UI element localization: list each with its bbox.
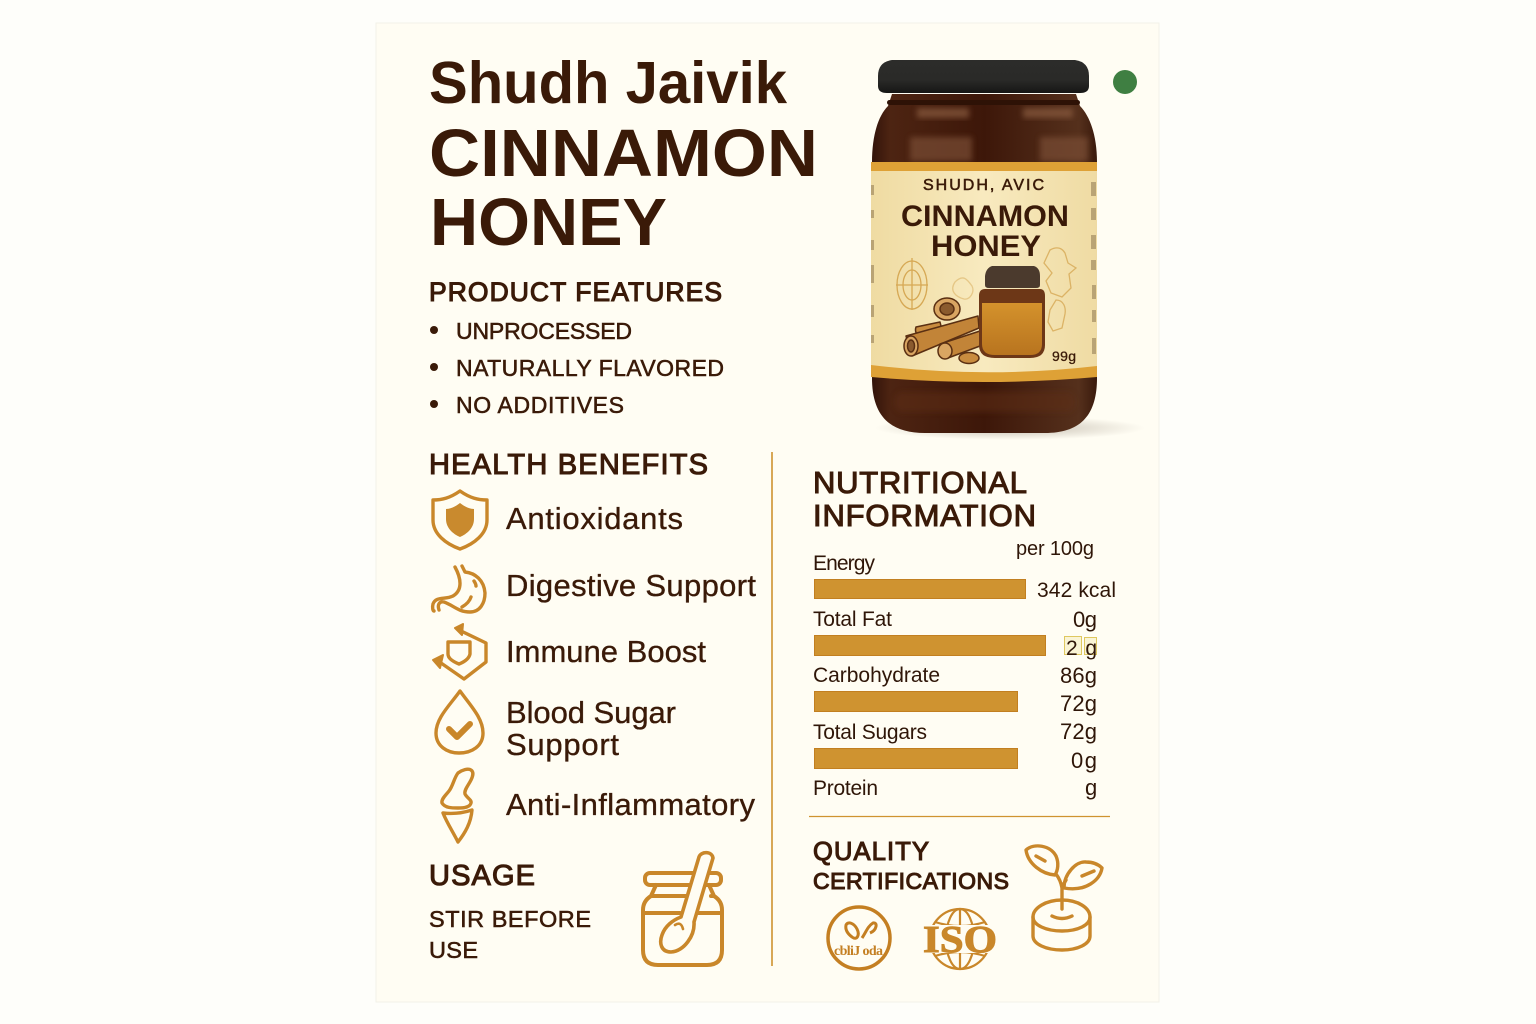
heading: nutritional information: INFORMATION [813, 498, 1036, 533]
icon: ISO seal: ISO [923, 919, 997, 961]
heading: usage: USAGE [429, 860, 535, 892]
jar glass body [872, 94, 1097, 433]
icon: sprout in pot [1026, 846, 1102, 950]
energy row [813, 552, 1116, 602]
carbohydrate row [813, 663, 1097, 716]
icon: honey jar with spoon [643, 853, 722, 965]
features list: NATURALLY FLAVORED [456, 355, 724, 381]
divider [809, 816, 1110, 818]
honey jar [871, 60, 1145, 440]
benefit: blood sugar support: Support [506, 727, 619, 762]
heading: product features: PRODUCT FEATURES [429, 277, 722, 307]
total sugars row: 72g [1060, 719, 1097, 744]
usage text: STIR BEFORE [429, 906, 591, 932]
benefit: immune boost [433, 624, 706, 679]
total fat row: Total Fat [813, 608, 892, 631]
benefit: anti-inflammatory: Anti-Inflammatory [506, 787, 756, 822]
benefit: anti-inflammatory [442, 769, 756, 842]
icon: shield [433, 491, 487, 549]
heading: nutritional information [813, 465, 1036, 533]
icon: hexagon shield with arrows [433, 624, 486, 679]
protein row: g [1085, 775, 1097, 800]
heading: quality certifications [813, 838, 1009, 894]
label mini jar [979, 266, 1045, 358]
energy row: 342 kcal [1037, 579, 1116, 602]
benefit: blood sugar support [436, 691, 676, 762]
title: CINNAMON [429, 116, 818, 191]
nutrition chart [813, 538, 1116, 800]
total sugars row: 0 g [1071, 748, 1097, 773]
label cinnamon sticks [904, 298, 980, 364]
carbohydrate row: 86g [1060, 663, 1097, 688]
icon: drop with check [436, 691, 483, 753]
benefit: digestive support: Digestive Support [506, 568, 756, 603]
features list: NO ADDITIVES [456, 392, 624, 418]
total fat row [813, 607, 1097, 660]
jar label: CINNAMON [901, 200, 1069, 233]
jar label: SHUDH, AVIC [923, 177, 1044, 194]
features list [430, 318, 724, 418]
per 100g note: per 100g [1016, 538, 1094, 560]
jar shadow [875, 416, 1145, 440]
title: HONEY [430, 185, 667, 260]
label sketch: target and honeycomb [896, 248, 1076, 331]
heading: quality certifications: QUALITY [813, 838, 929, 866]
benefit: blood sugar support: Blood Sugar [506, 695, 676, 730]
icon: organic seal: cbliJ oda [834, 944, 883, 959]
icon: ISO seal [922, 909, 998, 969]
total sugars row: Total Sugars [813, 721, 927, 744]
usage text [429, 906, 591, 963]
heading: quality certifications: CERTIFICATIONS [813, 868, 1009, 894]
heading: nutritional information: NUTRITIONAL [813, 465, 1027, 500]
divider [771, 452, 773, 966]
jar label [871, 162, 1097, 382]
protein row [813, 775, 1097, 800]
benefit: digestive support [433, 566, 756, 612]
jar lid [878, 60, 1089, 93]
icon: organic seal [828, 907, 890, 969]
features list: UNPROCESSED [456, 318, 632, 344]
glitched value highlight [1064, 636, 1096, 654]
usage text: USE [429, 937, 478, 963]
benefit: antioxidants [433, 491, 683, 549]
energy row: Energy [813, 552, 876, 575]
carbohydrate row: 72g [1060, 691, 1097, 716]
jar label: HONEY [931, 230, 1041, 263]
total fat row: 2 g [1066, 637, 1097, 660]
total fat row: 0g [1073, 607, 1097, 632]
heading: health benefits: HEALTH BENEFITS [429, 449, 708, 481]
icon: green organic dot [1113, 70, 1137, 94]
icon: joint [442, 769, 473, 842]
panel: product card [376, 23, 1159, 1002]
title [429, 50, 818, 260]
total sugars row [813, 719, 1097, 773]
benefit: antioxidants: Antioxidants [506, 501, 683, 536]
title: Shudh Jaivik [429, 50, 787, 116]
label side microtext [871, 182, 1096, 354]
carbohydrate row: Carbohydrate [813, 664, 940, 687]
protein row: Protein [813, 777, 878, 800]
jar label: 99g [1052, 348, 1076, 364]
benefit: immune boost: Immune Boost [506, 634, 706, 669]
icon: stomach [433, 566, 485, 612]
